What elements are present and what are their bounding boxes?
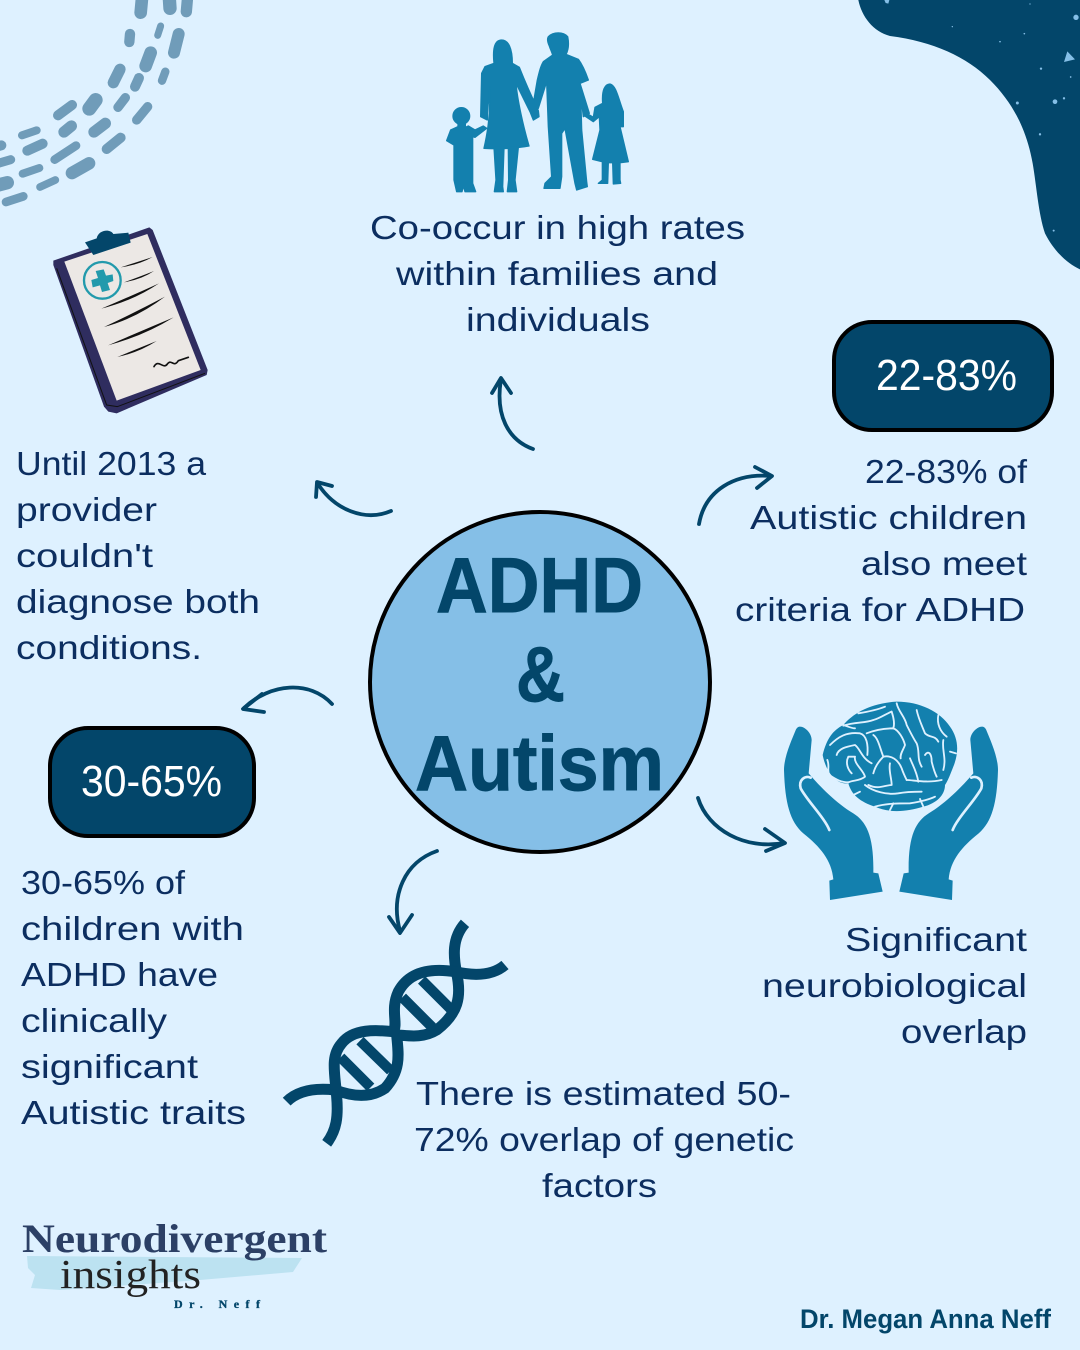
text: diagnosis history bbox=[16, 446, 260, 667]
logo: Neurodivergent insights: Neurodivergent bbox=[22, 1216, 328, 1261]
arrow: to 22-83% text bbox=[699, 467, 772, 524]
central circle: title: Autism bbox=[415, 719, 664, 807]
decorative dashes: top left corner bbox=[0, 0, 187, 202]
text: families: Co-occur in high rates bbox=[370, 210, 745, 247]
text: families: within families and bbox=[395, 256, 718, 293]
arrow: to 30-65% pill bbox=[243, 688, 332, 712]
text: 30-65% statistic: ADHD have bbox=[21, 957, 218, 994]
logo: Neurodivergent insights bbox=[22, 1216, 328, 1311]
text: 22-83% statistic bbox=[735, 454, 1028, 629]
text: neurobiological overlap bbox=[762, 922, 1028, 1051]
central circle: title: & bbox=[516, 630, 565, 718]
text: 22-83% statistic: criteria for ADHD bbox=[735, 592, 1025, 629]
text: 30-65% statistic bbox=[21, 865, 246, 1132]
text: diagnosis history: couldn't bbox=[16, 538, 154, 575]
brain bbox=[823, 702, 957, 811]
text: diagnosis history: conditions. bbox=[16, 630, 202, 667]
text: neurobiological overlap: neurobiological bbox=[762, 968, 1027, 1005]
pill: 30-65%: 30-65% bbox=[81, 757, 222, 806]
text: 30-65% statistic: clinically bbox=[21, 1003, 167, 1040]
text: 30-65% statistic: Autistic traits bbox=[21, 1095, 246, 1132]
pill: 22-83%: 22-83% bbox=[876, 351, 1017, 400]
text: diagnosis history: Until 2013 a bbox=[16, 446, 206, 483]
right hand bbox=[899, 727, 998, 900]
icon: clipboard bbox=[53, 227, 208, 413]
arrow: to clipboard bbox=[316, 482, 391, 515]
pill: 22-83% bbox=[834, 322, 1052, 430]
decorative blob: top right corner bbox=[858, 0, 1080, 269]
logo: Neurodivergent insights: Dr. Neff bbox=[174, 1297, 261, 1311]
text: families: individuals bbox=[466, 302, 650, 339]
icon: DNA helix bbox=[287, 923, 505, 1143]
left hand bbox=[784, 727, 883, 900]
credit: author: Dr. Megan Anna Neff bbox=[800, 1304, 1052, 1334]
logo: Neurodivergent insights: insights bbox=[60, 1251, 201, 1297]
icon: hands holding brain bbox=[784, 702, 998, 900]
text: genetic overlap: 72% overlap of genetic bbox=[414, 1122, 794, 1159]
arrow: to DNA bbox=[389, 851, 437, 933]
arrow: to brain bbox=[698, 798, 785, 851]
text: diagnosis history: diagnose both bbox=[16, 584, 260, 621]
arrow: to families bbox=[492, 378, 533, 449]
central circle: title bbox=[370, 512, 710, 852]
text: genetic overlap: factors bbox=[542, 1168, 657, 1205]
text: 30-65% statistic: significant bbox=[21, 1049, 199, 1086]
text: neurobiological overlap: overlap bbox=[901, 1014, 1027, 1051]
text: genetic overlap bbox=[414, 1076, 794, 1205]
text: 30-65% statistic: 30-65% of bbox=[21, 865, 186, 902]
central circle: title: ADHD bbox=[436, 541, 643, 629]
text: 30-65% statistic: children with bbox=[21, 911, 244, 948]
icon: family silhouette bbox=[447, 33, 628, 192]
text: 22-83% statistic: Autistic children bbox=[750, 500, 1027, 537]
text: neurobiological overlap: Significant bbox=[845, 922, 1028, 959]
pill: 30-65% bbox=[50, 728, 254, 836]
text: diagnosis history: provider bbox=[16, 492, 157, 529]
text: 22-83% statistic: 22-83% of bbox=[865, 454, 1028, 491]
text: families bbox=[370, 210, 745, 339]
text: genetic overlap: There is estimated 50- bbox=[416, 1076, 791, 1113]
text: 22-83% statistic: also meet bbox=[861, 546, 1028, 583]
